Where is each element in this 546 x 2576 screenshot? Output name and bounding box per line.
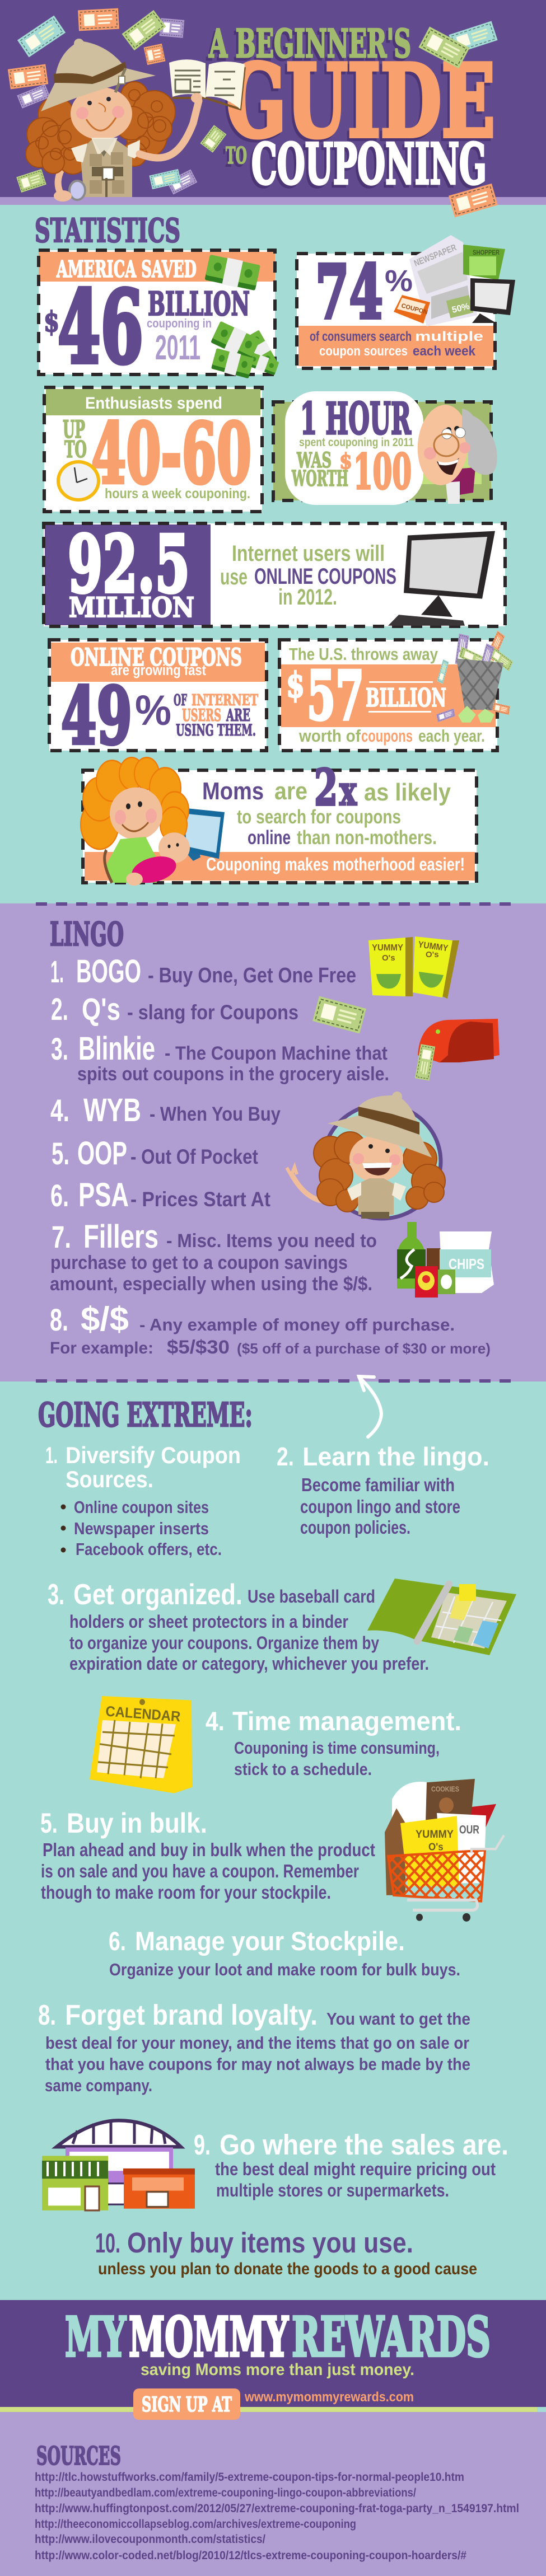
panel: u.s. throws away 57 billion — [279, 631, 513, 751]
source links: http://theeconomiccollapseblog.com/archives/extreme-couponing — [35, 2518, 356, 2531]
heading: lingo: LINGO — [50, 915, 124, 953]
tip 8 forget brand loyalty — [38, 1999, 470, 2095]
item 7 fillers: amount, especially when using the $/$. — [50, 1273, 372, 1295]
item 7 fillers: Fillers — [83, 1219, 158, 1255]
sources — [35, 2441, 519, 2562]
item 5 oop: - Out Of Pocket — [130, 1145, 258, 1168]
panel: 1 hour was worth $100: $ — [339, 448, 352, 474]
panel: online coupons growing fast: INTERNET — [192, 692, 258, 709]
panel: 74 percent of consumers: 74 — [315, 249, 383, 336]
panel: moms are 2x as likely: than non-mothers. — [297, 827, 437, 849]
tip 3 get organized: 3. — [48, 1579, 64, 1611]
panel: 74 percent of consumers: coupon sources — [319, 344, 408, 359]
item 2 q's: Q's — [82, 991, 120, 1027]
item 4 wyb — [50, 1092, 281, 1128]
panel: america saved 46 billion: 46 — [58, 269, 143, 386]
header background — [0, 0, 546, 197]
source links: http://www.color-coded.net/blog/2010/12/tlcs-extreme-couponing-coupon-hoarders/# — [35, 2549, 466, 2562]
header lilac band — [0, 197, 546, 205]
tip 8 forget brand loyalty: 8. — [38, 1999, 56, 2031]
panel: moms are 2x as likely: 2 — [314, 758, 338, 817]
icon: storefronts — [42, 2120, 195, 2210]
panel: america saved 46 billion: AMERICA SAVED — [56, 256, 197, 283]
tip 1 diversify: Newspaper inserts — [74, 1519, 209, 1538]
icon: groceries — [397, 1222, 494, 1298]
tip 1 diversify: 1. — [45, 1442, 58, 1468]
panel: online coupons growing fast: USING THEM. — [176, 721, 256, 739]
tip 4 time management: Time management. — [232, 1706, 461, 1736]
item 6 psa: - Prices Start At — [130, 1188, 270, 1211]
tip 9 go where the sales are: 9. — [194, 2129, 211, 2161]
panel: 92.5 million: in 2012. — [278, 585, 337, 610]
item 8 dollar off dollar: $/$ — [81, 1300, 129, 1338]
sources background — [0, 2412, 546, 2576]
panel: u.s. throws away 57 billion: $ — [286, 664, 305, 705]
panel: 1 hour was worth $100: WORTH — [291, 466, 348, 491]
item 5 oop: OOP — [77, 1135, 127, 1172]
tip 8 forget brand loyalty: that you have coupons for may not always be made by the — [45, 2054, 470, 2074]
item 4 wyb: WYB — [83, 1092, 141, 1128]
item 8 dollar off dollar: $5/$30 — [167, 1337, 230, 1358]
source links: http://beautyandbedlam.com/extreme-couponing-lingo-coupon-abbreviations/ — [35, 2486, 416, 2499]
panel: america saved 46 billion: $ — [44, 305, 59, 338]
panel: moms are 2x as likely: Couponing makes motherhood easier! — [206, 854, 465, 874]
speech bubble — [285, 391, 423, 505]
tip 2 learn the lingo: Learn the lingo. — [302, 1442, 489, 1471]
panel: online coupons growing fast: ONLINE COUPONS — [71, 644, 242, 672]
tip 2 learn the lingo: 2. — [277, 1442, 294, 1471]
panel: online coupons growing fast: are growing fast — [111, 662, 206, 678]
tip 5 buy in bulk: though to make room for your stockpile. — [41, 1882, 331, 1903]
panel: u.s. throws away 57 billion: 57 — [307, 657, 364, 736]
panel: america saved 46 billion — [39, 250, 279, 386]
tip 1 diversify: Sources. — [66, 1466, 153, 1492]
panel: 1 hour was worth $100: WAS — [296, 448, 332, 472]
panel: enthusiasts spend 40-60 hours: hours a week couponing. — [105, 486, 250, 502]
icon: clock — [57, 460, 100, 502]
icon: newspaper: NEWSPAPER — [413, 243, 458, 269]
item 2 q's: 2. — [51, 991, 68, 1027]
section divider top of lingo — [36, 902, 511, 906]
item 1 bogo — [50, 953, 356, 990]
item 1 bogo: 1. — [50, 954, 64, 989]
heading: statistics: STATISTICS — [35, 212, 180, 250]
tip 5 buy in bulk: 5. — [40, 1807, 58, 1839]
item 1 bogo: - Buy One, Get One Free — [148, 964, 356, 987]
item 8 dollar off dollar: - Any example of money off purchase. — [139, 1315, 455, 1334]
tip 5 buy in bulk: is on sale and you have a coupon. Remember — [41, 1861, 359, 1881]
panel: 74 percent of consumers — [297, 235, 515, 368]
lavender lingo background — [0, 903, 546, 1381]
panel: going extreme — [38, 1395, 516, 2278]
panel: enthusiasts spend 40-60 hours: UP — [63, 416, 85, 444]
panel: 92.5 million: Internet users will — [232, 541, 385, 566]
item 2 q's: - slang for Coupons — [127, 1001, 298, 1024]
tip 9 go where the sales are — [194, 2129, 508, 2200]
item 5 oop: 5. — [52, 1136, 69, 1171]
icon: shopping cart: OUR — [459, 1823, 479, 1837]
icon: cereal boxes: YUMMY — [417, 940, 449, 954]
item 1 bogo: BOGO — [76, 953, 141, 990]
tip 5 buy in bulk — [40, 1807, 375, 1903]
tip 1 diversify: Diversify Coupon — [66, 1442, 241, 1468]
icon: section arrow — [359, 1376, 381, 1437]
item 7 fillers: 7. — [52, 1219, 71, 1254]
heading: going extreme: GOING EXTREME: — [38, 1395, 253, 1434]
tip 3 get organized — [48, 1579, 429, 1674]
source links: http://www.ilovecouponmonth.com/statistics/ — [35, 2533, 265, 2546]
item 3 blinkie: 3. — [51, 1031, 68, 1066]
panel: moms are 2x as likely: Moms — [202, 778, 264, 805]
icon: shopping cart — [385, 1779, 504, 1922]
item 3 blinkie: spits out coupons in the grocery aisle. — [77, 1064, 389, 1085]
tip 3 get organized: Get organized. — [73, 1579, 242, 1611]
website url: www.mymommyrewards.com — [244, 2390, 414, 2405]
tagline: saving Moms more than just money. — [141, 2360, 414, 2379]
icon: coupon binder — [367, 1579, 516, 1655]
icon: desktop computer — [388, 531, 495, 626]
tip 8 forget brand loyalty: same company. — [45, 2076, 152, 2095]
icon: shopping cart: O's — [428, 1841, 444, 1852]
title: a beginner's guide to couponing — [208, 21, 495, 197]
icon: cereal boxes: O's — [382, 953, 395, 963]
tip 8 forget brand loyalty: best deal for your money, and the items that go on sale or — [45, 2033, 469, 2053]
panel: lingo — [50, 915, 500, 1437]
logo: MOMMY — [129, 2305, 289, 2369]
item 3 blinkie — [51, 1031, 389, 1085]
panel: 1 hour was worth $100: 100 — [353, 444, 412, 500]
tip 2 learn the lingo — [277, 1442, 489, 1538]
tip 4 time management: 4. — [206, 1706, 225, 1736]
item 2 q's — [51, 991, 298, 1027]
item 7 fillers: purchase to get to a coupon savings — [50, 1252, 348, 1273]
source links: http://www.huffingtonpost.com/2012/05/27/extreme-couponing-frat-toga-party_n_1549197.html — [35, 2502, 519, 2515]
tip 6 manage your stockpile — [109, 1926, 460, 1979]
panel: 74 percent of consumers: % — [385, 264, 413, 298]
panel: enthusiasts spend 40-60 hours: TO — [64, 436, 87, 463]
icon: cash stack top — [204, 254, 260, 291]
tip 3 get organized: to organize your coupons. Organize them by — [69, 1633, 379, 1653]
tip 4 time management: Couponing is time consuming, — [234, 1738, 440, 1758]
sign up button: SIGN UP AT — [142, 2393, 232, 2416]
item 4 wyb: - When You Buy — [150, 1103, 281, 1125]
icon: shopper flyer — [463, 245, 505, 280]
tip 9 go where the sales are: multiple stores or supermarkets. — [216, 2180, 449, 2200]
tip 8 forget brand loyalty: You want to get the — [326, 2009, 470, 2029]
panel: online coupons growing fast: 49 — [61, 671, 132, 762]
item 8 dollar off dollar: ($5 off of a purchase of $30 or more) — [237, 1340, 491, 1357]
footer background — [0, 2300, 546, 2407]
panel: moms are 2x as likely — [81, 757, 477, 887]
tip 1 diversify — [45, 1442, 241, 1559]
icon: trash can with coupons — [436, 631, 513, 723]
tip 4 time management: stick to a schedule. — [234, 1759, 372, 1779]
panel: enthusiasts spend 40-60 hours — [44, 387, 262, 512]
item 8 dollar off dollar — [50, 1300, 491, 1358]
tip 1 diversify: Online coupon sites — [74, 1497, 209, 1517]
icon: shopper flyer: SHOPPER — [473, 249, 500, 256]
tip 4 time management — [206, 1706, 461, 1779]
tip 9 go where the sales are: Go where the sales are. — [220, 2129, 508, 2161]
panel: online coupons growing fast: OF — [174, 692, 187, 709]
panel: online coupons growing fast: % — [135, 687, 171, 734]
icon: coupon book — [394, 295, 430, 324]
panel: 92.5 million: 92.5 — [68, 519, 190, 611]
item 6 psa — [50, 1176, 270, 1214]
panel: u.s. throws away 57 billion: BILLION — [366, 683, 446, 713]
panel: online coupons growing fast — [49, 640, 267, 762]
panel: moms are 2x as likely: are — [274, 778, 307, 805]
panel: 74 percent of consumers: multiple — [415, 329, 483, 344]
source links: http://tlc.howstuffworks.com/family/5-extreme-coupon-tips-for-normal-people10.htm — [35, 2471, 464, 2484]
character: explorer girl in circle — [287, 1092, 445, 1219]
panel: online coupons growing fast: USERS — [182, 706, 221, 725]
item 5 oop — [52, 1135, 258, 1172]
icon: cash pile — [211, 321, 279, 379]
tip 2 learn the lingo: Become familiar with — [301, 1474, 455, 1495]
tip 10 only buy items you use: 10. — [95, 2228, 120, 2259]
icon: coupon book: COUPON — [400, 302, 428, 316]
footer green strip — [0, 2407, 537, 2412]
icon: newspaper — [409, 235, 477, 326]
tip 2 learn the lingo: coupon policies. — [300, 1517, 410, 1538]
panel: u.s. throws away 57 billion: worth of — [298, 726, 361, 746]
item 4 wyb: 4. — [50, 1093, 69, 1128]
panel: moms are 2x as likely: x — [339, 767, 357, 814]
teal going extreme background — [0, 1381, 546, 2300]
icon: blinkie coupon machine — [415, 1019, 500, 1081]
panel: moms are 2x as likely: to search for coupons — [237, 806, 401, 828]
panel: 92.5 million: use — [220, 565, 248, 589]
title: a beginner's guide to couponing: TO — [226, 142, 247, 169]
icon: cereal boxes: YUMMY — [372, 943, 403, 953]
icon: calendar: CALENDAR — [105, 1703, 181, 1725]
icon: tablet screen — [181, 808, 225, 861]
tip 3 get organized: holders or sheet protectors in a binder — [69, 1612, 348, 1632]
icon: computer monitor — [470, 278, 515, 323]
tip 5 buy in bulk: Buy in bulk. — [67, 1807, 207, 1839]
item 8 dollar off dollar: For example: — [50, 1339, 153, 1357]
panel: 92.5 million — [44, 519, 505, 626]
panel: 92.5 million: MILLION — [69, 591, 194, 624]
icon: groceries: CHIPS — [449, 1256, 484, 1272]
icon: shopping cart: COOKIES — [431, 1785, 459, 1793]
item 7 fillers: - Misc. Items you need to — [166, 1230, 377, 1252]
icon: calendar — [90, 1696, 192, 1793]
sign up button — [133, 2388, 240, 2420]
tip 10 only buy items you use — [95, 2227, 477, 2278]
panel: 74 percent of consumers: of consumers search — [310, 329, 412, 344]
item 6 psa: 6. — [50, 1178, 69, 1213]
tip 5 buy in bulk: Plan ahead and buy in bulk when the product — [43, 1839, 375, 1860]
teal statistics background — [0, 205, 546, 903]
panel: 1 hour was worth $100: spent couponing in 2011 — [299, 436, 414, 449]
coupon over title — [418, 26, 470, 69]
tip 1 diversify: Facebook offers, etc. — [76, 1539, 222, 1559]
tip 3 get organized: expiration date or category, whichever you prefer. — [69, 1654, 429, 1674]
item 3 blinkie: - The Coupon Machine that — [165, 1043, 388, 1064]
panel: online coupons growing fast: ARE — [226, 706, 250, 725]
panel: enthusiasts spend 40-60 hours: 40-60 — [91, 405, 251, 502]
item 7 fillers — [50, 1219, 377, 1295]
logo: MY — [65, 2305, 127, 2369]
icon: cereal boxes: O's — [426, 950, 439, 959]
panel: u.s. throws away 57 billion: each year. — [418, 726, 485, 746]
panel: 92.5 million: ONLINE COUPONS — [254, 564, 396, 589]
panel: 1 hour was worth $100 — [273, 391, 497, 505]
panel: enthusiasts spend 40-60 hours: Enthusiasts spend — [85, 394, 222, 413]
tip 10 only buy items you use: Only buy items you use. — [127, 2227, 413, 2259]
tip 6 manage your stockpile: Organize your loot and make room for bulk buys. — [109, 1960, 460, 1979]
panel: 1 hour was worth $100: 1 HOUR — [300, 394, 412, 444]
tip 6 manage your stockpile: Manage your Stockpile. — [135, 1926, 405, 1956]
item 6 psa: PSA — [78, 1176, 129, 1214]
item 3 blinkie: Blinkie — [78, 1031, 155, 1067]
panel: 74 percent of consumers: each week — [413, 344, 476, 359]
icon: cereal boxes — [368, 936, 459, 999]
title: a beginner's guide to couponing: A BEGINNER'S — [208, 21, 411, 67]
tip 6 manage your stockpile: 6. — [109, 1926, 126, 1956]
character: explorer girl — [26, 39, 245, 202]
panel: u.s. throws away 57 billion: coupons — [361, 726, 413, 746]
tip 2 learn the lingo: coupon lingo and store — [300, 1496, 460, 1517]
icon: newspaper: 50% — [451, 302, 470, 315]
source links — [35, 2471, 519, 2562]
panel: america saved 46 billion: BILLION — [148, 285, 250, 323]
tip 8 forget brand loyalty: Forget brand loyalty. — [65, 1999, 318, 2031]
footer: my mommy rewards — [65, 2305, 491, 2420]
panel: america saved 46 billion: couponing in — [147, 316, 212, 330]
panel: u.s. throws away 57 billion: The U.S. throws away — [289, 644, 438, 664]
tip 9 go where the sales are: the best deal might require pricing out — [215, 2159, 496, 2179]
character: ben franklin — [414, 402, 497, 504]
item 8 dollar off dollar: 8. — [50, 1302, 68, 1337]
heading: sources: SOURCES — [36, 2441, 121, 2471]
panel: moms are 2x as likely: as likely — [364, 779, 451, 806]
panel: america saved 46 billion: 2011 — [155, 329, 200, 367]
tip 10 only buy items you use: unless you plan to donate the goods to a good cause — [98, 2260, 477, 2278]
section divider top of going extreme — [36, 1379, 511, 1383]
panel: moms are 2x as likely: online — [248, 827, 291, 849]
tip 3 get organized: Use baseball card — [248, 1586, 375, 1607]
header coupons — [8, 8, 498, 217]
logo — [65, 2305, 491, 2369]
icon: coupon — [312, 996, 366, 1033]
character: mom with baby — [81, 757, 190, 887]
icon: shopping cart: YUMMY — [416, 1828, 454, 1840]
